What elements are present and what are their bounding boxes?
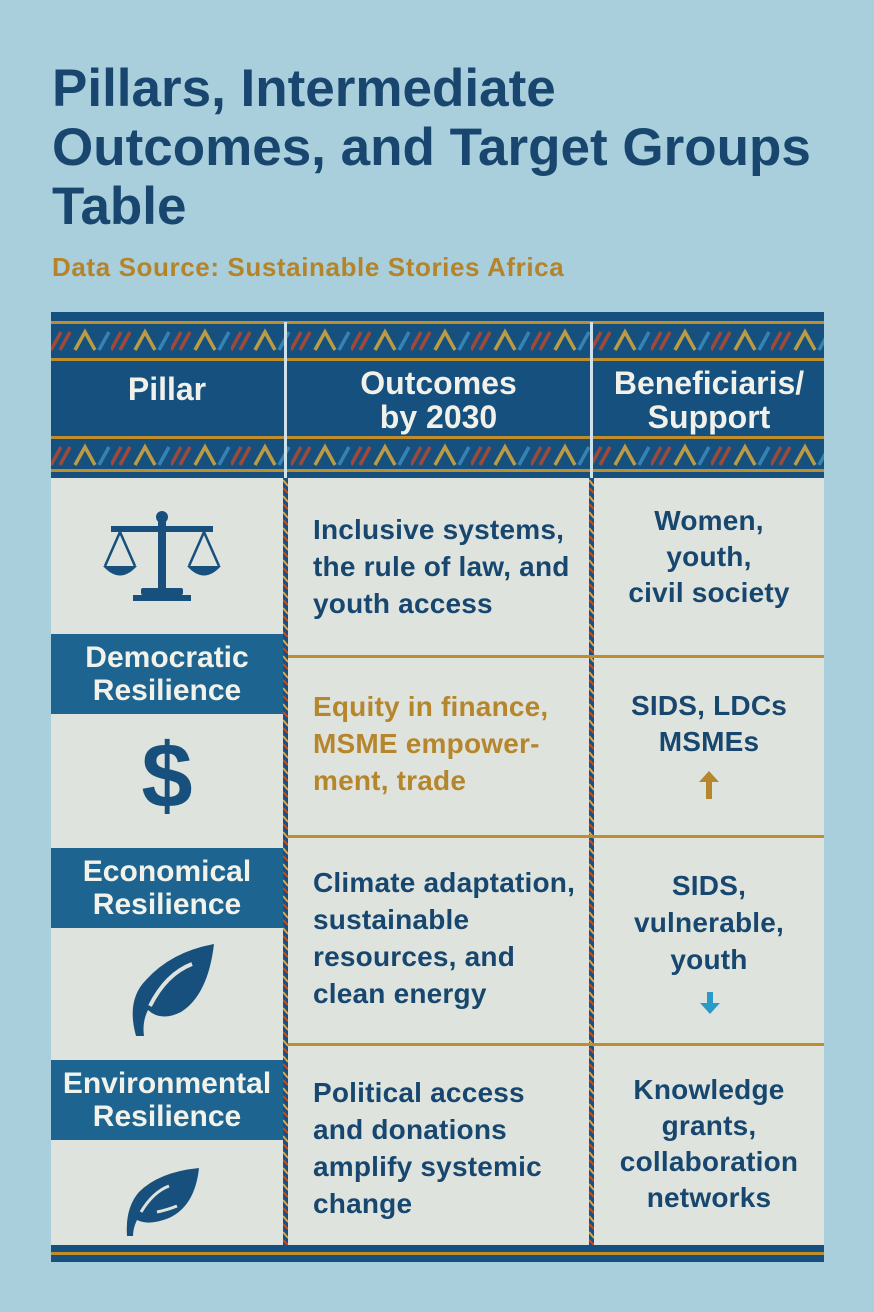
beneficiaries 3: SIDS, xyxy=(672,870,746,901)
band: Environmental Resilience xyxy=(51,1060,283,1140)
outcome 3: Climate adaptation, xyxy=(313,867,575,898)
icon: leaf xyxy=(132,944,214,1036)
outcome 3: clean energy xyxy=(313,978,487,1009)
beneficiaries 2 xyxy=(631,690,787,757)
bottom band xyxy=(51,1252,824,1255)
icon: small leaf xyxy=(126,1168,199,1236)
beneficiaries 4: collaboration xyxy=(620,1146,798,1177)
band: Economical Resilience: Economical xyxy=(83,855,251,888)
table xyxy=(51,312,824,1262)
outcome 4: Political access xyxy=(313,1077,525,1108)
beneficiaries 1: youth, xyxy=(666,541,752,572)
band: Democratic Resilience: Resilience xyxy=(93,674,241,707)
header: Pillar: Pillar xyxy=(128,371,206,407)
beneficiaries 2: MSMEs xyxy=(659,726,759,757)
outcome 4 xyxy=(313,1077,542,1219)
beneficiaries 3: youth xyxy=(670,944,748,975)
outcome 2: MSME empower- xyxy=(313,728,540,759)
header: Beneficiaries: Beneficiaris/ xyxy=(614,365,804,401)
outcome 1: Inclusive systems, xyxy=(313,514,564,545)
beneficiaries 4: Knowledge xyxy=(633,1074,785,1105)
beneficiaries 3: vulnerable, xyxy=(634,907,784,938)
title: Pillars, Intermediate xyxy=(52,59,556,118)
beneficiaries 3 xyxy=(634,870,784,975)
outcome 4: and donations xyxy=(313,1114,507,1145)
beneficiaries 4: grants, xyxy=(662,1110,756,1141)
header: Outcomes by 2030 xyxy=(360,365,517,435)
title xyxy=(52,59,811,236)
outcome 2: Equity in finance, xyxy=(313,691,548,722)
column 1: pillars xyxy=(51,478,283,1245)
title: Outcomes, and Target Groups xyxy=(52,118,811,177)
icon: dollar: $ xyxy=(141,725,193,827)
subtitle: data source: Data Source: Sustainable Stories Africa xyxy=(52,252,564,282)
beneficiaries 4 xyxy=(620,1074,798,1213)
header row xyxy=(51,321,824,478)
header: Outcomes by 2030: by 2030 xyxy=(380,399,497,435)
column 2 and 3 rows xyxy=(288,478,589,655)
header: Beneficiaries: Support xyxy=(648,399,770,435)
column dividers xyxy=(283,479,288,1245)
beneficiaries 1 xyxy=(628,505,790,608)
band: Economical Resilience: Resilience xyxy=(93,888,241,921)
beneficiaries 4: networks xyxy=(647,1182,771,1213)
outcome 2 xyxy=(313,691,548,796)
beneficiaries 2: SIDS, LDCs xyxy=(631,690,787,721)
outcome 2: ment, trade xyxy=(313,765,466,796)
icon: scales xyxy=(103,511,221,601)
outcome 1: youth access xyxy=(313,588,493,619)
outcome 4: amplify systemic xyxy=(313,1151,542,1182)
band: Environmental Resilience: Environmental xyxy=(63,1067,271,1100)
header: Beneficiaries xyxy=(614,365,804,435)
arrow down xyxy=(700,992,720,1014)
beneficiaries 1: civil society xyxy=(628,577,790,608)
band: Environmental Resilience: Resilience xyxy=(93,1100,241,1133)
band: Economical Resilience xyxy=(51,848,283,928)
band: Democratic Resilience: Democratic xyxy=(85,641,249,674)
outcome 1: the rule of law, and xyxy=(313,551,570,582)
outcome 4: change xyxy=(313,1188,412,1219)
title: Table xyxy=(52,177,186,236)
outcome 3 xyxy=(313,867,575,1009)
header: Outcomes by 2030: Outcomes xyxy=(360,365,517,401)
beneficiaries 1: Women, xyxy=(654,505,764,536)
outcome 3: resources, and xyxy=(313,941,515,972)
outcome 3: sustainable xyxy=(313,904,469,935)
band: Democratic Resilience xyxy=(51,634,283,714)
outcome 1 xyxy=(313,514,570,619)
arrow up xyxy=(699,771,719,799)
